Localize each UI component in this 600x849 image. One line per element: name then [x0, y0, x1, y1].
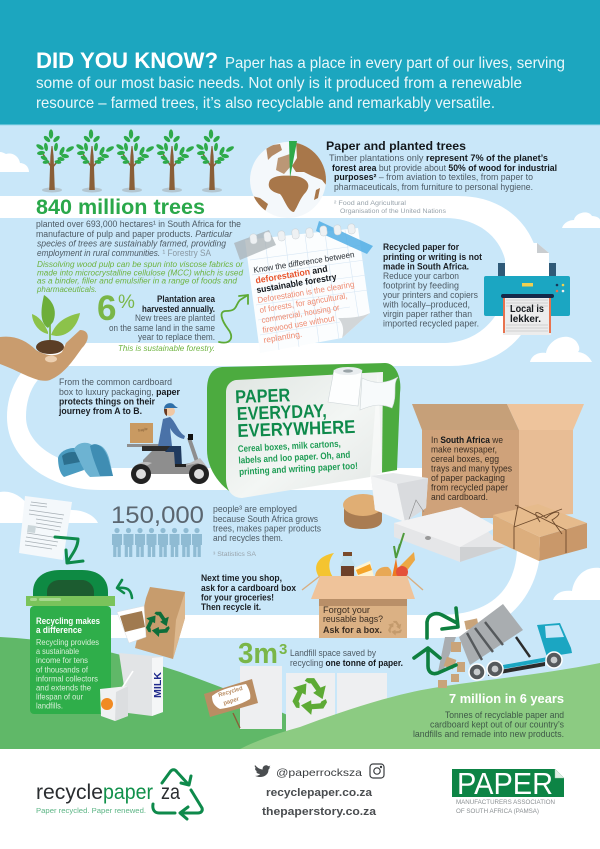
icon: recycling bin with text: lifespan of our — [36, 692, 83, 702]
text: next time you shop — [201, 573, 297, 612]
text: next time you shop: ask for a cardboard box — [201, 583, 297, 593]
arrow: document to bin — [55, 537, 83, 563]
arrows: recycling loop — [414, 608, 458, 674]
icon: recycling bin with text: income for tens — [36, 656, 88, 665]
text: next time you shop: for your groceries! — [201, 592, 274, 602]
icon: juice box — [100, 686, 128, 721]
icon: recycling truck — [438, 604, 572, 688]
heading: 840 million trees: 840 million trees — [36, 196, 205, 219]
icon: cardboard grocery box: reusable bags? — [323, 614, 383, 624]
text: paper and planted trees: Paper and planted trees — [326, 139, 466, 153]
icon: large cardboard box: and cardboard. — [431, 492, 488, 502]
logo: PAMSA: OF SOUTH AFRICA (PAMSA) — [456, 808, 539, 815]
text: plantation description — [36, 219, 244, 294]
header band: resource – farmed trees, it’s also recyclable and remarkably versatile. — [36, 95, 495, 112]
text: recycled paper not made in South Africa: made in South Africa. — [383, 262, 469, 272]
panel: paper everyday, everywhere: printing and writing paper too! — [239, 460, 358, 477]
logo: recyclepaper za — [36, 770, 202, 819]
icon: milk carton: MILK — [152, 672, 164, 698]
icon: recycled paper sign: Recycled — [218, 686, 244, 699]
icon: large cardboard box: make newspaper, — [431, 444, 497, 454]
logo: PAMSA: MANUFACTURERS ASSOCIATION — [456, 799, 555, 806]
note: deforestation vs sustainable forestry — [234, 221, 373, 353]
icon: printer: Local is — [510, 304, 544, 315]
note: deforestation vs sustainable forestry: sustainable forestry — [256, 272, 337, 295]
footer background — [0, 749, 600, 849]
icon: large cardboard box: cereal boxes, egg — [431, 454, 499, 464]
arrow: squiggle to note — [219, 295, 248, 343]
arrow: cup to bin — [117, 580, 132, 598]
header band: Paper has a place in every part of our lives, serving — [225, 55, 565, 72]
text: paper and planted trees: Timber plantations only represent 7% of the planet’s — [329, 153, 548, 163]
text: 7 million in 6 years — [413, 691, 565, 739]
header band: some of our most basic needs. Not only is it produced from a renewable — [36, 75, 522, 92]
text: recycled paper not made in South Africa: Reduce your carbon — [383, 271, 459, 281]
text: plantation description: Dissolving wood pulp can be spun into viscose fabrics or — [37, 259, 244, 269]
text: plantation description: as a binder, filler and emulsifier in a range of foods and — [37, 276, 237, 286]
stat: 3m3 landfill: 3 — [279, 641, 287, 658]
social links: recyclepaper.co.za — [266, 787, 373, 799]
stat: 150,000 people — [111, 502, 322, 558]
text: 7 million in 6 years: cardboard kept out of our country’s — [430, 720, 565, 730]
stat: 150,000 people: because South Africa grows — [213, 514, 319, 524]
note: deforestation vs sustainable forestry: of forests, for agricultural, — [259, 290, 348, 315]
icon: cardboard grocery box: Ask for a box. — [323, 625, 382, 635]
icon: round cardboard box — [343, 494, 383, 529]
icon: globe — [250, 141, 330, 218]
stat: 3m3 landfill: Landfill space saved by — [290, 648, 377, 658]
social links: thepaperstory.co.za — [262, 806, 377, 818]
icon: groceries — [316, 533, 415, 578]
icon: recycling bin with text: Recycling provides — [36, 638, 99, 647]
icon: recycled paper sign — [204, 679, 258, 728]
header band: DID YOU KNOW? — [36, 48, 218, 73]
stat: 6% harvested: Plantation area — [157, 294, 216, 304]
text: cardboard protects: box to luxury packaging, paper — [59, 387, 181, 397]
text: cardboard protects: protects things on their — [59, 396, 155, 406]
text: next time you shop: Next time you shop, — [201, 573, 282, 583]
text: paper and planted trees: Organisation of the United Nations — [340, 208, 446, 215]
icon: recycled paper sign: paper — [223, 696, 241, 707]
header band — [0, 0, 600, 125]
row of five trees — [35, 129, 235, 192]
panel: paper everyday, everywhere: EVERYWHERE — [237, 416, 356, 441]
note: deforestation vs sustainable forestry: deforestation and — [255, 264, 328, 285]
light hill — [238, 663, 600, 750]
logo: recyclepaper za: paper — [103, 781, 153, 804]
hills — [0, 637, 360, 750]
text: paper and planted trees: ² Food and Agricultural — [334, 200, 406, 207]
stat: 6% harvested: This is sustainable forestry. — [118, 343, 215, 353]
stat: 150,000 people: and recycles them. — [213, 533, 283, 543]
note ring holes — [249, 224, 356, 244]
icon: recycling bin with text: a sustainable — [36, 647, 79, 656]
panel: paper everyday, everywhere: labels and loo paper. Oh, and — [238, 449, 351, 465]
icon: printer — [484, 243, 570, 335]
icon: coffee cup — [117, 606, 146, 643]
text: plantation description: manufacture of pulp and paper products. Particular — [36, 229, 233, 239]
icon: recycling bin with text: informal collectors — [36, 674, 98, 684]
note: deforestation vs sustainable forestry: commercial, housing or — [261, 302, 340, 325]
logo: recyclepaper za: recycle — [36, 781, 103, 804]
tape: blue right — [316, 221, 373, 254]
stat: 3m3 landfill — [238, 638, 403, 670]
note: deforestation vs sustainable forestry: Deforestation is the clearing — [257, 279, 355, 305]
text: 7 million in 6 years: landfills and remade into new products. — [413, 729, 564, 739]
icon: large cardboard box: trays and many types — [431, 464, 513, 474]
tape: grey left — [234, 230, 276, 260]
panel: paper everyday, everywhere — [207, 363, 400, 498]
icon: recycling bin with text: and extends the — [36, 684, 91, 692]
icon: document sheet — [19, 496, 72, 560]
stat: 6% harvested: harvested annually. — [142, 304, 215, 314]
stat: 6% harvested: on the same land in the same — [109, 323, 215, 333]
icon: large cardboard box: of paper packaging — [431, 473, 505, 483]
stat: 150,000 people: trees, makes paper products — [213, 524, 322, 534]
logo: recyclepaper za: za — [161, 781, 180, 804]
panel: paper everyday, everywhere: EVERYDAY, — [236, 400, 327, 424]
icon: large cardboard box: In South Africa we — [431, 435, 503, 445]
stat: 6% harvested: New trees are planted — [135, 313, 215, 323]
text: recycled paper not made in South Africa: footprint by feeding — [383, 280, 459, 290]
text: recycled paper not made in South Africa: Recycled paper for — [383, 242, 459, 252]
stat: 6% harvested: 6 — [97, 289, 116, 328]
stat: 6% harvested — [97, 289, 216, 353]
text: plantation description: species of trees are sustainably farmed, providing — [37, 238, 226, 248]
text: plantation description: pharmaceuticals. — [36, 284, 97, 294]
icon: seedling in hand — [0, 295, 88, 381]
note: deforestation vs sustainable forestry: firewood use without — [262, 313, 336, 335]
white road — [0, 196, 541, 638]
icon: gift box with string — [493, 504, 587, 561]
text: recycled paper not made in South Africa — [382, 242, 482, 328]
text: cardboard protects: From the common cardboard — [59, 377, 172, 387]
icon: twitter bird — [255, 765, 270, 777]
text: recycled paper not made in South Africa: virgin paper rather than — [383, 309, 472, 319]
panel: paper everyday, everywhere: Cereal boxes, milk cartons, — [238, 438, 341, 454]
icon: cardboard grocery box: Forgot your — [323, 605, 370, 615]
icon: recycling bin with text: landfills. — [36, 702, 63, 710]
sky background — [0, 124, 600, 750]
stat: 6% harvested: % — [118, 292, 135, 313]
logo: PAMSA: PAPER — [457, 766, 553, 801]
icon: delivery scooter: fragile — [138, 427, 148, 433]
icon: cardboard grocery box — [302, 576, 423, 638]
sheets of paper — [240, 666, 387, 733]
stat: 3m3 landfill: 3m — [238, 638, 278, 670]
icon: recycling bin with text: a difference — [36, 625, 82, 635]
icon: recycling bin with text — [26, 570, 115, 714]
stat: 150,000 people: 150,000 — [111, 502, 204, 529]
icon: pizza box — [394, 507, 505, 562]
note: deforestation vs sustainable forestry: Know the difference between — [253, 249, 355, 275]
social links: @paperrocksza — [276, 768, 362, 779]
icon: printer: lekker. — [510, 314, 541, 325]
text: paper and planted trees: purposes² – from aviation to textiles, from paper to — [334, 172, 533, 182]
logo: PAMSA — [452, 766, 564, 815]
icon: delivery scooter — [127, 403, 209, 484]
text: recycled paper not made in South Africa: your printers and copiers — [383, 290, 479, 300]
clouds — [0, 152, 600, 600]
text: plantation description: planted over 693,000 hectares¹ in South Africa for the — [36, 219, 241, 229]
text: recycled paper not made in South Africa: printing or writing is not — [383, 252, 482, 262]
icon: white noodle box — [371, 473, 428, 522]
panel: paper everyday, everywhere: PAPER — [235, 384, 291, 407]
text: paper and planted trees — [326, 139, 557, 215]
icon: heart gift box — [58, 443, 113, 477]
text: next time you shop: Then recycle it. — [201, 602, 261, 612]
text: recycled paper not made in South Africa: with locally–produced, — [382, 300, 470, 310]
icon: large cardboard box — [412, 404, 584, 518]
text: 7 million in 6 years: Tonnes of recyclable paper and — [445, 710, 564, 720]
logo: recyclepaper za: Paper recycled. Paper renewed. — [36, 808, 146, 815]
stat: 150,000 people: people³ are employed — [213, 504, 297, 514]
stat: 6% harvested: year to replace them. — [138, 332, 215, 342]
icon: recycling symbol — [287, 678, 328, 719]
text: paper and planted trees: forest area but provide about 50% of wood for industrial — [332, 163, 557, 173]
note: deforestation vs sustainable forestry: replanting. — [263, 329, 303, 345]
text: paper and planted trees: pharmaceuticals, from furniture to personal hygiene. — [334, 182, 533, 192]
text: recycled paper not made in South Africa: imported recycled paper. — [383, 318, 479, 328]
text: plantation description: employment in rural communities. ¹ Forestry SA — [37, 248, 211, 258]
text: 7 million in 6 years: 7 million in 6 years — [449, 691, 564, 706]
stat: 3m3 landfill: recycling one tonne of paper. — [290, 658, 403, 668]
text: cardboard protects: journey from A to B. — [58, 406, 142, 416]
icon: toilet roll — [328, 367, 398, 410]
social links — [255, 764, 384, 818]
stat: 150,000 people: ³ Statistics SA — [213, 551, 257, 558]
text: cardboard protects — [58, 377, 181, 416]
icon: paper bag with recycling symbol — [135, 587, 185, 659]
icon: instagram — [370, 764, 384, 778]
icon: recycling bin with text: of thousands of — [36, 666, 89, 674]
icon: milk carton — [119, 653, 164, 716]
icon: large cardboard box: from recycled paper — [431, 482, 508, 492]
text: plantation description: made into microcrystalline cellulose (MCC) which is used — [37, 267, 243, 277]
icon: recycling bin with text: Recycling makes — [36, 616, 100, 626]
